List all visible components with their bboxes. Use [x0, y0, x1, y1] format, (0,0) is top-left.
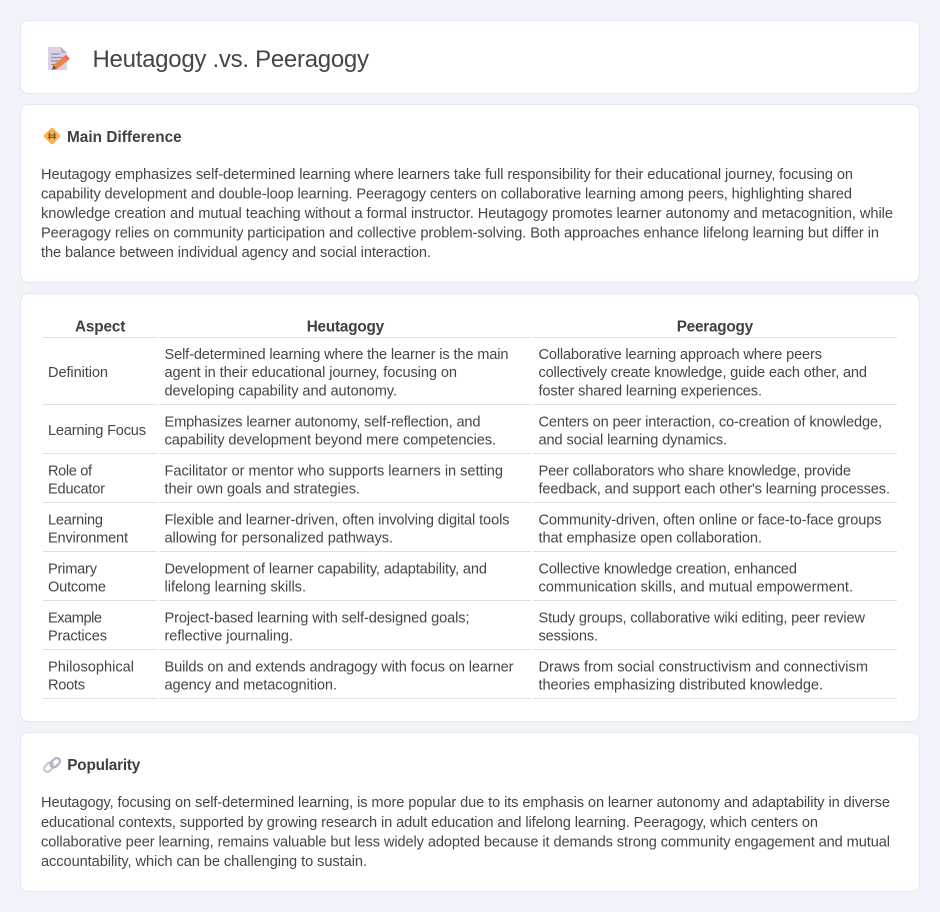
table row: definition: foster shared learning experiences.	[538, 384, 762, 400]
table header row: Heutagogy	[307, 318, 385, 336]
table row: definition: Definition	[48, 365, 108, 381]
table row: role of educator	[48, 464, 890, 498]
table row: example practices: Study groups, collaborative wiki editing, peer review	[538, 610, 865, 626]
heading: popularity: Popularity	[67, 757, 141, 774]
table row: philosophical roots: Roots	[48, 678, 85, 694]
table row: primary outcome: Collective knowledge creation, enhanced	[538, 562, 797, 578]
text block: popularity	[41, 795, 890, 870]
text block: popularity: collaborative peer learning, remains valuable but less widely adopted because it demands strong community engagement and mutual	[41, 834, 890, 850]
text block: popularity: Heutagogy, focusing on self-determined learning, is more popular due to its emphasis on learner autonomy and adaptability in diverse	[41, 795, 890, 811]
table row: example practices	[48, 610, 865, 644]
table row: definition: Self-determined learning where the learner is the main	[164, 347, 508, 363]
table row: learning environment	[48, 512, 882, 546]
table row: learning focus	[48, 414, 882, 448]
table row: definition: Collaborative learning approach where peers	[538, 347, 822, 363]
text block: main difference: Heutagogy emphasizes self-determined learning where learners take full responsibility for their educational journey, focusing on	[41, 167, 853, 183]
table row: definition: developing capability and autonomy.	[164, 384, 397, 400]
table row: primary outcome: Outcome	[48, 580, 106, 596]
table row: philosophical roots	[48, 660, 868, 694]
text block: main difference	[41, 167, 893, 261]
table row: definition	[48, 347, 867, 400]
table row: learning environment: that emphasize open collaboration.	[538, 530, 762, 546]
panel: main difference	[20, 104, 920, 282]
text block: popularity: accountability, which can be challenging to sustain.	[41, 854, 367, 870]
icon: memo with pencil	[48, 47, 70, 70]
text block: main difference: the balance between individual agency and social interaction.	[41, 245, 431, 261]
icon: warning diamond	[43, 127, 61, 145]
table row: learning environment: Flexible and learner-driven, often involving digital tools	[164, 512, 510, 528]
table row: learning focus: Emphasizes learner autonomy, self-reflection, and	[164, 414, 480, 430]
table row: philosophical roots: agency and metacognition.	[164, 678, 337, 694]
table row: role of educator: Facilitator or mentor who supports learners in setting	[164, 464, 503, 480]
table row: role of educator: their own goals and strategies.	[164, 482, 360, 498]
panel: popularity	[20, 732, 920, 892]
table row: primary outcome: lifelong learning skills.	[164, 580, 306, 596]
text block: popularity: educational contexts, supported by growing research in adult education and lifelong learning. Peeragogy, which centers on	[41, 815, 818, 831]
table row: primary outcome	[48, 562, 853, 596]
panel: title header	[20, 20, 920, 94]
heading: main difference: Main Difference	[67, 129, 182, 146]
table row: philosophical roots: theories emphasizing distributed knowledge.	[538, 678, 823, 694]
table row: learning focus: Centers on peer interaction, co-creation of knowledge,	[538, 414, 882, 430]
table row: philosophical roots: Builds on and extends andragogy with focus on learner	[164, 660, 514, 676]
table row: philosophical roots: Draws from social constructivism and connectivism	[538, 660, 868, 676]
text block: main difference: Peeragogy relies on community participation and collective problem-solving. Both approaches enhance lifelong learning but differ in	[41, 226, 879, 242]
table header row: Peeragogy	[677, 318, 754, 336]
table row: learning environment: allowing for personalized pathways.	[164, 530, 393, 546]
table row: learning focus: and social learning dynamics.	[538, 432, 727, 448]
table row: role of educator: feedback, and support each other's learning processes.	[538, 482, 890, 498]
panel: comparison table	[20, 294, 920, 722]
table row: primary outcome: communication skills, and mutual empowerment.	[538, 580, 853, 596]
icon: chain link	[43, 757, 61, 773]
table row: role of educator: Peer collaborators who share knowledge, provide	[538, 464, 851, 480]
table row: learning focus: Learning Focus	[48, 423, 146, 439]
table row: learning environment: Community-driven, often online or face-to-face groups	[538, 512, 882, 528]
table row: learning environment: Environment	[48, 530, 128, 546]
title: Heutagogy .vs. Peeragogy	[92, 46, 369, 73]
table row: primary outcome: Development of learner capability, adaptability, and	[164, 562, 487, 578]
table row: example practices: reflective journaling.	[164, 628, 293, 644]
text block: main difference: capability development and double-loop learning. Peeragogy centers on collaborative learning among peers, highlighting shared	[41, 187, 852, 203]
table row: primary outcome: Primary	[48, 562, 98, 578]
table row: definition: agent in their educational journey, focusing on	[164, 365, 457, 381]
table row: role of educator: Educator	[48, 482, 105, 498]
table row: role of educator: Role of	[48, 464, 93, 480]
table header row	[75, 318, 754, 336]
table row: philosophical roots: Philosophical	[48, 660, 134, 676]
table row: example practices: sessions.	[538, 628, 598, 644]
table row: learning environment: Learning	[48, 512, 103, 528]
table row: example practices: Practices	[48, 628, 107, 644]
table row: example practices: Project-based learning with self-designed goals;	[164, 610, 470, 626]
table row: learning focus: capability development beyond mere competencies.	[164, 432, 496, 448]
table row: definition: collectively create knowledge, guide each other, and	[538, 365, 867, 381]
text block: main difference: knowledge creation and mutual teaching without a formal instructor. Heutagogy promotes learner autonomy and metacognition, while	[41, 206, 893, 222]
table header row: Aspect	[75, 318, 125, 336]
table row: example practices: Example	[48, 610, 102, 626]
